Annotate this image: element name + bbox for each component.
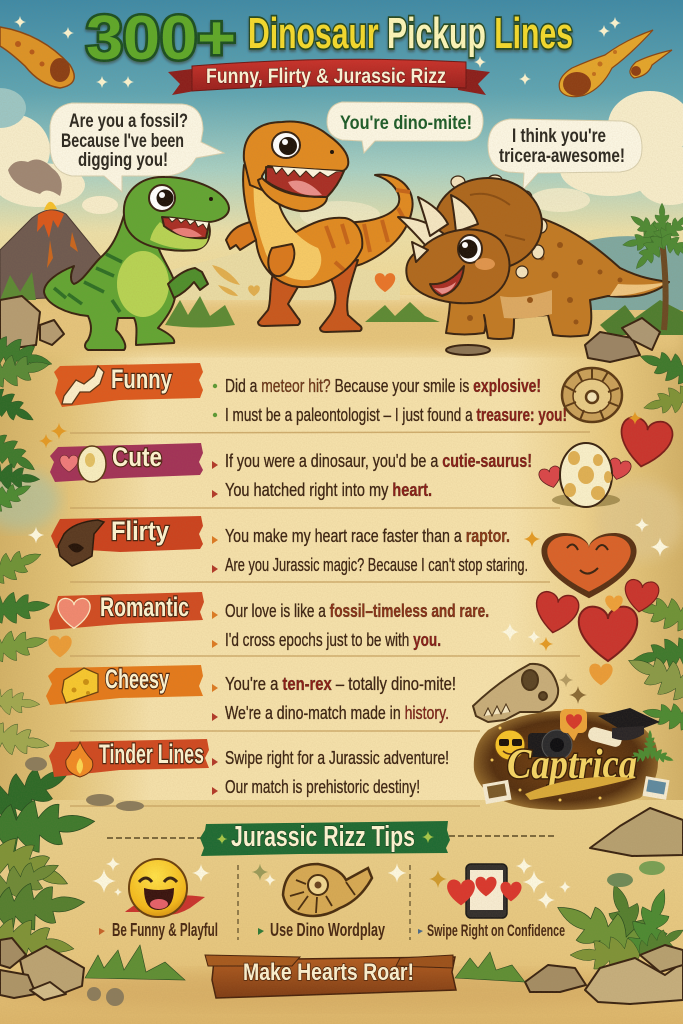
flirty lines: Are you Jurassic magic? Because I can't stop staring. xyxy=(225,555,528,575)
title: 300+ xyxy=(86,4,236,73)
tip dividers xyxy=(238,865,410,940)
funny banner: Funny xyxy=(111,364,172,394)
panel: romantic xyxy=(48,578,660,661)
icon: diploma and cap xyxy=(587,708,660,748)
icon: laughing emoji xyxy=(125,859,205,917)
speech bubble: dino-mite xyxy=(327,102,483,153)
clouds xyxy=(0,88,683,229)
ground stones top xyxy=(0,296,660,362)
flirty lines: You make my heart race faster than a raptor. xyxy=(225,526,510,546)
funny lines xyxy=(213,376,567,425)
tinder banner: Tinder Lines xyxy=(99,739,204,769)
romantic lines: I'd cross epochs just to be with you. xyxy=(225,630,441,650)
tinder banner xyxy=(49,739,209,777)
stars in sky xyxy=(14,16,621,88)
cute lines xyxy=(212,451,532,500)
small sparkles xyxy=(39,411,642,651)
romantic lines: Our love is like a fossil–timeless and rare. xyxy=(225,601,489,621)
tips heading text: Jurassic Rizz Tips xyxy=(231,821,415,853)
small ground flourishes xyxy=(212,265,260,296)
cute banner: Cute xyxy=(112,442,162,472)
icon: cookie heart xyxy=(541,533,637,598)
row dividers xyxy=(70,432,590,806)
flirty lines xyxy=(212,526,528,575)
icon: red heart xyxy=(616,415,675,471)
tip label xyxy=(418,922,565,940)
cheesy banner: Cheesy xyxy=(105,664,169,694)
tip: dino wordplay xyxy=(252,863,407,940)
icon: small heart at ground xyxy=(375,273,395,292)
tip label xyxy=(258,920,385,940)
tinder lines text: Our match is prehistoric destiny! xyxy=(225,777,420,797)
speech bubble: fossil xyxy=(50,103,224,192)
sparkles xyxy=(429,858,571,909)
speech bubble: fossil: Are you a fossil? xyxy=(69,111,188,132)
icon: sparkle xyxy=(559,673,587,704)
icon: orange heart xyxy=(589,664,613,685)
speech bubble: tricera-awesome: I think you're xyxy=(512,126,606,147)
palm: top right xyxy=(621,203,683,330)
sign text: Make Hearts Roar! xyxy=(243,959,414,986)
subtitle text: Funny, Flirty & Jurassic Rizz xyxy=(206,65,446,88)
funny banner xyxy=(54,363,203,407)
icon: small orange heart xyxy=(48,636,72,657)
wooden sign xyxy=(205,955,456,998)
romantic banner: Romantic xyxy=(100,592,189,622)
tip: be funny xyxy=(92,857,218,940)
mountains xyxy=(150,236,683,310)
icon: phone with hearts xyxy=(447,864,522,918)
cute lines: If you were a dinosaur, you'd be a cutie-saurus! xyxy=(225,451,532,471)
panel: cute xyxy=(50,415,675,507)
sparkles xyxy=(92,857,210,896)
orange t-rex xyxy=(226,122,413,332)
funny lines: I must be a paleontologist – I just found a treasure: you! xyxy=(225,405,567,425)
icon: fossil skull xyxy=(473,664,558,722)
speech bubble: tricera-awesome xyxy=(488,119,642,190)
sparkles xyxy=(252,863,407,886)
rocks: bottom and side xyxy=(0,808,683,1004)
tinder lines text xyxy=(212,748,449,797)
icon: volcano xyxy=(0,160,120,300)
panel: cheesy xyxy=(46,664,613,723)
panel: tinder lines xyxy=(49,739,449,797)
triceratops xyxy=(398,175,669,339)
icon: heart chat bubble xyxy=(560,709,587,741)
logo text: Captrica xyxy=(507,742,637,788)
foliage: right edge xyxy=(545,343,683,976)
tip: swipe right xyxy=(418,858,571,940)
speech bubble: tricera-awesome: tricera-awesome! xyxy=(499,146,625,167)
icon: camera xyxy=(528,730,572,760)
flirty banner xyxy=(51,516,203,566)
tip label: Swipe Right on Confidence xyxy=(427,922,565,940)
tips heading xyxy=(107,821,557,856)
cheesy lines: You're a ten-rex – totally dino-mite! xyxy=(225,674,456,694)
funny lines: Did a meteor hit? Because your smile is explosive! xyxy=(225,376,541,396)
tip label: Be Funny & Playful xyxy=(112,920,218,940)
icon: meteors right xyxy=(559,30,672,97)
speech bubble: fossil: Because I've been xyxy=(61,131,184,152)
green t-rex xyxy=(44,177,229,350)
foliage: left edge xyxy=(0,332,97,969)
title xyxy=(86,4,573,73)
cute banner xyxy=(50,442,203,482)
title: Dinosaur Pickup Lines xyxy=(248,9,573,58)
cute lines: You hatched right into my heart. xyxy=(225,480,432,500)
icon: emoji sunglasses xyxy=(495,730,525,760)
icon: ammonite xyxy=(562,368,622,422)
cheesy lines xyxy=(212,674,456,723)
scattered pebbles xyxy=(25,757,665,1006)
icon: ammonite shell xyxy=(283,864,372,916)
icon: photos and palm xyxy=(482,730,676,804)
icon: meteor left xyxy=(0,27,74,88)
shrubs: bottom xyxy=(85,945,525,982)
captrica logo badge xyxy=(474,708,676,810)
panel: flirty xyxy=(51,516,637,598)
panel: funny xyxy=(54,363,622,425)
ground shrubs xyxy=(0,272,683,335)
cheesy banner xyxy=(46,664,203,705)
speech bubble: fossil: digging you! xyxy=(78,150,168,171)
icon: egg with hearts xyxy=(538,443,632,507)
subtitle ribbon xyxy=(168,59,490,95)
tinder lines text: Swipe right for a Jurassic adventure! xyxy=(225,748,449,768)
romantic lines xyxy=(212,601,489,650)
icon: cluster of hearts xyxy=(532,578,660,661)
romantic banner xyxy=(49,592,204,630)
flirty banner: Flirty xyxy=(111,516,169,546)
cheesy lines: We're a dino-match made in history. xyxy=(225,703,449,723)
tip label: Use Dino Wordplay xyxy=(270,920,385,940)
speech bubble: dino-mite: You're dino-mite! xyxy=(340,113,472,134)
